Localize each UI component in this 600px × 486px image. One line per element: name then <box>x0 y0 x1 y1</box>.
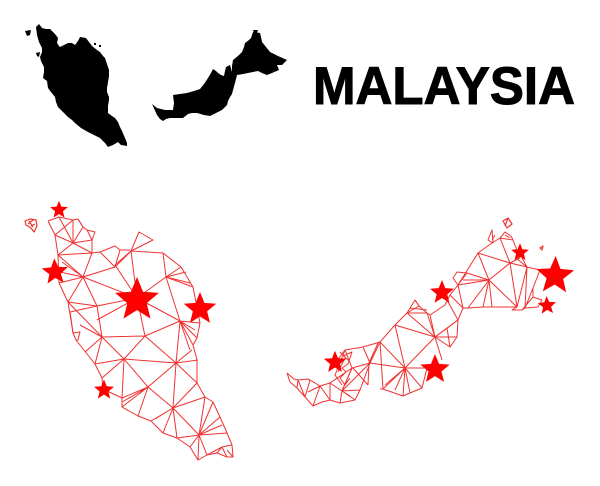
star: south-west <box>94 380 114 398</box>
black map: east Malaysia <box>152 30 287 121</box>
star: north-west <box>50 201 68 218</box>
red stars <box>41 201 575 398</box>
star: Sabah north <box>511 243 529 260</box>
black map: peninsular Malaysia <box>25 24 127 147</box>
star: Sabah east large <box>536 255 575 292</box>
title: MALAYSIA <box>313 57 575 116</box>
red island <box>25 219 37 232</box>
star: Sarawak north <box>430 280 454 303</box>
star: west <box>41 258 69 284</box>
red polygonal mesh: east Malaysia <box>287 218 543 406</box>
star: central large <box>115 277 159 319</box>
star: Sarawak central <box>420 354 450 382</box>
star: east coast <box>184 292 216 323</box>
red polygonal mesh: peninsular Malaysia <box>25 217 233 460</box>
star: Sarawak west <box>324 351 346 372</box>
star: Sabah south-east <box>537 296 557 314</box>
